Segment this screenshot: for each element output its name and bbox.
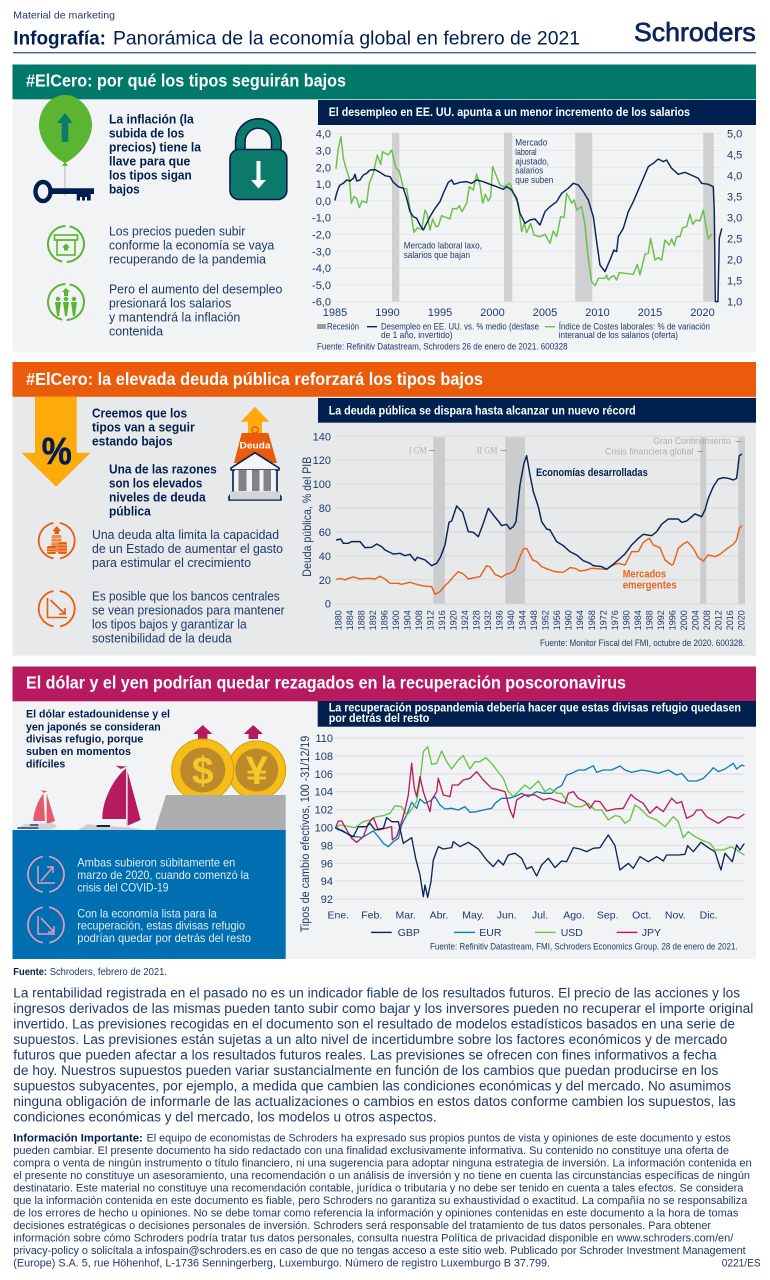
axis labels: y: 110 xyxy=(315,733,333,745)
axis labels: years: 1880 xyxy=(333,610,343,630)
important information: de los errores de hecho u opiniones. No se debe tomar como referencia la información y opiniones contenidas en este documento a la hora de tomas xyxy=(13,1208,739,1220)
label: emerging markets: Mercados xyxy=(623,569,666,581)
axis labels: right: 3,0 xyxy=(727,213,742,225)
axis labels: y: 98 xyxy=(321,840,333,852)
annotation: tight labour market: salarios xyxy=(515,166,544,177)
axis labels: left: 1,0 xyxy=(316,179,331,191)
text: unemployment presses wages: y mantendrá la inflación xyxy=(109,310,240,324)
axis labels: years: 1956 xyxy=(552,610,562,630)
text: inflation key: La inflación (la xyxy=(109,112,195,126)
text: rates stay low: tipos van a seguir xyxy=(92,420,195,434)
axis labels: months: May. xyxy=(462,909,484,921)
axis labels: years: 1960 xyxy=(564,610,574,630)
axis labels: years: 1912 xyxy=(426,610,436,630)
axis labels: years: 1996 xyxy=(667,610,677,630)
axis labels: months: Ene. xyxy=(327,909,349,921)
text: inflation key: bajos xyxy=(109,182,140,196)
axis labels: years: 2005 xyxy=(533,307,557,319)
event labels xyxy=(409,436,742,457)
text: inflation key: subida de los xyxy=(109,126,184,140)
text: safe-haven currencies: divisas refugio, porque xyxy=(26,734,143,746)
line: developed economies xyxy=(337,454,742,569)
text: high debt limits spending: para estimular el crecimiento xyxy=(92,556,251,570)
label: emerging markets xyxy=(623,569,677,591)
axis labels: left: 3,0 xyxy=(316,146,331,158)
axis labels: y: 108 xyxy=(315,751,333,763)
axis labels: years: 1924 xyxy=(460,610,470,630)
heading: section 3: El dólar y el yen podrían quedar rezagados en la recuperación poscoronavirus xyxy=(26,672,626,692)
disclaimer paragraph: de hoy. Nuestros supuestos pueden variar sustancialmente en función de los cambios que puedan producirse en los xyxy=(13,1063,719,1078)
axis labels: years: 1896 xyxy=(379,610,389,630)
line: JPY xyxy=(336,763,744,842)
disclaimer paragraph: ingresos derivados de las mismas pueden tanto subir como bajar y los inversores pueden no recuperar el importe original xyxy=(13,1001,753,1016)
axis labels: months: Dic. xyxy=(700,909,718,921)
line chart: effective exchange rates xyxy=(315,733,744,921)
text: unemployment presses wages xyxy=(109,282,282,338)
panel: blue sea text box xyxy=(12,830,286,959)
text: lag behind: Con la economía lista para la xyxy=(77,906,217,920)
axis labels: y xyxy=(315,733,333,906)
line: GBP xyxy=(336,818,744,897)
text: high debt: Una de las razones xyxy=(109,462,217,476)
axis labels: y: 104 xyxy=(315,787,333,799)
axis labels: months: Jul. xyxy=(532,909,548,921)
annotation: tight labour market: Mercado xyxy=(515,138,547,149)
legend: chart 1: Desempleo en EE. UU. vs. % medio (desfase xyxy=(381,321,539,332)
axis labels: months: Jun. xyxy=(497,909,517,921)
panel: section 2, public debt xyxy=(12,362,756,656)
axis labels: y: 20 xyxy=(319,575,331,587)
legend: currencies xyxy=(371,927,661,939)
axis labels: y: 40 xyxy=(319,551,331,563)
text: rates stay low: Creemos que los xyxy=(92,406,187,420)
chart title: US unemployment: El desempleo en EE. UU. apunta a un menor incremento de los salarios xyxy=(329,107,690,119)
chart title: currencies: por detrás del resto xyxy=(329,713,429,725)
label: emerging markets: emergentes xyxy=(623,579,677,591)
axis labels: years: 1995 xyxy=(428,307,452,319)
source: infographic: Schroders, febrero de 2021. xyxy=(50,967,167,978)
event labels: Gran Confinamiento xyxy=(653,436,731,447)
axis labels: months: Mar. xyxy=(395,909,416,921)
axis labels: y: 100 xyxy=(313,479,331,491)
text: safe-haven currencies: yen japonés se consideran xyxy=(26,721,161,733)
axis labels: right: 2,5 xyxy=(727,234,742,246)
line: EUR xyxy=(336,763,744,847)
text: safe-haven currencies xyxy=(26,709,170,770)
icon: coin stacks xyxy=(36,520,78,562)
legend: currencies: GBP xyxy=(398,927,420,939)
illustration: dollar coin xyxy=(172,725,234,801)
axis labels: y: 0 xyxy=(325,599,331,611)
icon: falling chart xyxy=(25,904,67,946)
important information: El equipo de economistas de Schroders ha expresado sus propios puntos de vista y opiniones de este documento y estos xyxy=(146,1133,731,1145)
axis labels: years: 1884 xyxy=(345,610,355,630)
axis labels: months: Ago. xyxy=(563,909,585,921)
disclaimer paragraph: supuestos subyacentes, por ejemplo, a medida que cambien las condiciones económicas y del mercado. No asumimos xyxy=(13,1079,731,1094)
axis labels: y xyxy=(313,431,331,611)
axis labels: months: Feb. xyxy=(361,909,382,921)
important information: información sobre cómo Schroders podría tratar tus datos personales, consulta nuestra Política de privacidad disponible en www.schroders.com/en/ xyxy=(13,1232,734,1244)
icon: padlock xyxy=(230,124,287,200)
line chart: public debt xyxy=(313,431,746,630)
axis labels: y: 80 xyxy=(319,503,331,515)
important information: destinatario. Este material no constituye una recomendación contable, jurídica o tributaria y no debe ser tenido en cuenta a tales efectos. Se considera xyxy=(13,1183,744,1195)
important information: pueden cambiar. El presente documento ha sido redactado con una finalidad exclusivamente informativa. Su contenido no constituye una oferta de xyxy=(13,1145,729,1157)
axis title: chart 3: Tipos de cambio efectivos, 100 -31/12/19 xyxy=(300,736,312,932)
text: sharp rise: marzo de 2020, cuando comenzó la xyxy=(77,868,249,882)
important information: 0221/ES xyxy=(722,1257,761,1269)
axis labels: y: 96 xyxy=(321,858,333,870)
axis labels: right: 1,5 xyxy=(727,276,742,288)
text: safe-haven currencies: El dólar estadounidense y el xyxy=(26,709,170,721)
legend: chart 1: interanual de los salarios (oferta) xyxy=(559,330,678,341)
text: high debt: son los elevados xyxy=(109,476,202,490)
text: prices may rise xyxy=(109,224,274,266)
axis labels: left xyxy=(312,129,331,309)
line: labour cost index xyxy=(336,137,712,286)
legend: currencies: EUR xyxy=(479,927,502,939)
axis labels: years: 1992 xyxy=(656,610,666,630)
illustration: small boat xyxy=(17,790,57,830)
axis labels: years: 1948 xyxy=(529,610,539,630)
text: inflation key: precios) tiene la xyxy=(109,140,202,154)
label: developed economies: Economías desarrolladas xyxy=(536,467,648,479)
event labels: I GM xyxy=(409,446,427,456)
illustration: large boat xyxy=(67,765,144,837)
icon: rising chart xyxy=(25,853,67,895)
text: rates stay low xyxy=(92,406,195,448)
line: emerging markets xyxy=(337,526,742,594)
axis labels: right: 5,0 xyxy=(727,129,742,141)
heading: section 2 xyxy=(12,362,756,397)
shaded event bands xyxy=(433,437,745,604)
axis labels: years: 2000 xyxy=(480,307,505,319)
disclaimer paragraph: condiciones económicas y del mercado, los modelos u otros aspectos. xyxy=(13,1110,437,1125)
text: high debt xyxy=(109,462,217,518)
important information: Información Importante: xyxy=(13,1133,143,1145)
axis labels: years: 1920 xyxy=(448,610,458,630)
axis labels: left: 2,0 xyxy=(316,162,331,174)
chart title: public debt: La deuda pública se dispara hasta alcanzar un nuevo récord xyxy=(329,405,636,417)
illustration: yen coin xyxy=(228,725,286,799)
text: high debt limits spending xyxy=(92,528,283,570)
text: safe-haven currencies: difíciles xyxy=(26,758,65,770)
axis labels: years: 1928 xyxy=(472,610,482,630)
axis labels: years: 1988 xyxy=(644,610,654,630)
axis labels: left: 4,0 xyxy=(316,129,331,141)
axis labels: years: 2015 xyxy=(638,307,662,319)
important information: privacy-policy o solicítala a infospain@schroders.es en caso de que no tengas acceso a este sitio web. Publicado por Schroder Investment Management xyxy=(13,1245,746,1257)
text: inflation key: los tipos sigan xyxy=(109,168,192,182)
icon: balloon and key xyxy=(36,95,94,201)
text: lag behind xyxy=(77,906,251,945)
recession bands xyxy=(392,133,714,302)
illustration: dollar coin: $ xyxy=(192,750,214,793)
label: marketing material: Material de marketing xyxy=(13,10,115,21)
axis title: chart 2: Deuda pública, % del PIB xyxy=(300,457,314,577)
disclaimer paragraph: ninguna obligación de informarle de las actualizaciones o cambios en estos datos conforme cambien los supuestos, las xyxy=(13,1094,736,1109)
text: prices may rise: conforme la economía se vaya xyxy=(109,238,274,252)
axis labels: months xyxy=(327,909,718,921)
important information xyxy=(13,1133,761,1269)
axis labels: years: 1968 xyxy=(587,610,597,630)
axis labels: years: 1916 xyxy=(437,610,447,630)
line: unemployment xyxy=(335,159,722,302)
axis labels: years xyxy=(323,307,715,319)
annotation: tight labour market: ajustado, xyxy=(515,156,549,167)
axis labels: years: 1976 xyxy=(610,610,620,630)
text: high debt limits spending: Una deuda alta limita la capacidad xyxy=(92,528,279,542)
source: chart 1: Fuente: Refinitiv Datastream, Schroders 26 de enero de 2021. 600328 xyxy=(317,341,568,352)
heading: section 1: #ElCero: por qué los tipos seguirán bajos xyxy=(26,71,346,91)
chart title: public debt xyxy=(318,398,756,423)
axis labels: years: 1936 xyxy=(495,610,505,630)
header xyxy=(13,10,756,53)
disclaimer paragraph: futuros que pueden afectar a los resultados futuros reales. Las previsiones se ofrecen con fines informativos a fecha xyxy=(13,1047,717,1062)
annotation: tight labour market: laboral xyxy=(515,147,537,158)
axis labels: years: 1990 xyxy=(375,307,400,319)
axis labels: years: 2012 xyxy=(714,610,724,630)
panel: section 1, why rates stay low xyxy=(12,64,756,352)
title: Infografía: xyxy=(13,27,106,49)
axis labels: months: Sep. xyxy=(597,909,619,921)
text: rates stay low: estando bajos xyxy=(92,434,173,448)
disclaimer paragraph: La rentabilidad registrada en el pasado no es un indicador fiable de los resultados futuros. El precio de las acciones y los xyxy=(13,985,740,1000)
title: Panorámica de la economía global en febrero de 2021 xyxy=(113,27,580,49)
source: infographic: Fuente: xyxy=(13,967,47,978)
heading: section 1 xyxy=(12,64,756,99)
illustration: grey platform xyxy=(155,795,286,830)
chart title: currencies xyxy=(318,701,756,727)
axis labels: years: 1892 xyxy=(368,610,378,630)
axis labels: left: -5,0 xyxy=(312,280,331,292)
axis labels: years: 2020 xyxy=(736,610,746,630)
axis labels: right: 1,0 xyxy=(727,297,742,309)
annotation: loose labour market: salarios que bajan xyxy=(404,250,470,261)
axis labels: years: 1980 xyxy=(621,610,631,630)
axis labels: y: 102 xyxy=(315,805,333,817)
text: safe-haven currencies: suben en momentos xyxy=(26,746,131,758)
important information: que la información contenida en este documento es fiable, pero Schroders no garantiza su exhaustividad o exactitud. La compañía no se responsabiliza xyxy=(13,1195,748,1207)
icon: people with ring xyxy=(45,281,87,323)
axis labels: years: 1952 xyxy=(541,610,551,630)
text: unemployment presses wages: presionará los salarios xyxy=(109,296,231,310)
text: central banks: sostenibilidad de la deuda xyxy=(92,632,232,646)
legend: currencies: JPY xyxy=(642,927,661,939)
axis labels: years: 1964 xyxy=(575,610,585,630)
axis labels: left: -4,0 xyxy=(312,263,331,275)
axis labels: years: 2000 xyxy=(679,610,689,630)
axis labels: years: 1904 xyxy=(402,610,412,630)
axis labels: years: 2008 xyxy=(702,610,712,630)
axis labels: left: -2,0 xyxy=(312,230,331,242)
axis labels: months: Oct. xyxy=(632,909,651,921)
chart title: currencies: La recuperación pospandemia debería hacer que estas divisas refugio quedasen xyxy=(329,703,741,715)
text: high debt: niveles de deuda xyxy=(109,490,207,504)
important information: el presente no constituye un asesoramiento, una recomendación o un análisis de inversión y no tiene en cuenta las circunstancias específicas de ningún xyxy=(13,1170,750,1182)
text: central banks xyxy=(92,590,285,646)
axis labels: years: 1984 xyxy=(633,610,643,630)
text: central banks: Es posible que los bancos centrales xyxy=(92,590,280,604)
text: sharp rise xyxy=(77,855,249,894)
text: prices may rise: recuperando de la pandemia xyxy=(109,252,266,266)
axis labels: months: Abr. xyxy=(430,909,448,921)
text: lag behind: recuperación, estas divisas refugio xyxy=(77,919,245,933)
axis labels: right: 4,5 xyxy=(727,150,742,162)
axis labels: years: 1985 xyxy=(323,307,347,319)
text: inflation key: llave para que xyxy=(109,154,190,168)
axis labels: right: 2,0 xyxy=(727,255,742,267)
axis labels: y: 94 xyxy=(321,876,333,888)
annotation: loose labour market: Mercado laboral laxo, xyxy=(404,241,482,252)
axis labels: years: 2004 xyxy=(690,610,700,630)
disclaimer paragraph: supuestos. Las previsiones están sujetas a un alto nivel de incertidumbre sobre los factores económicos y de mercado xyxy=(13,1032,727,1047)
icon: box with ring xyxy=(45,223,87,265)
important information: decisiones estratégicas o decisiones personales de inversión. Schroders será responsable del tratamiento de tus datos personales. Para obtener xyxy=(13,1220,711,1232)
axis labels: right xyxy=(727,129,742,309)
annotation: tight labour market: que suben xyxy=(515,175,553,186)
axis labels: right: 3,5 xyxy=(727,192,742,204)
axis labels: years: 1940 xyxy=(506,610,516,630)
axis labels: months: Nov. xyxy=(665,909,686,921)
annotation: loose labour market xyxy=(404,241,482,261)
text: lag behind: podrían quedar por detrás del resto xyxy=(77,931,251,945)
axis labels: years: 2020 xyxy=(690,307,715,319)
event labels: Crisis financiera global xyxy=(605,446,693,457)
text: prices may rise: Los precios pueden subir xyxy=(109,224,245,238)
heading: section 3 xyxy=(12,666,756,701)
text: sharp rise: crisis del COVID-19 xyxy=(77,880,169,894)
axis labels: years: 1888 xyxy=(356,610,366,630)
legend: chart 1: Recesión xyxy=(327,321,359,332)
legend: chart 1: Índice de Costes laborales: % de variación xyxy=(559,321,710,332)
icon: percent down arrow xyxy=(22,397,91,487)
axis labels: left: -1,0 xyxy=(312,213,331,225)
text: high debt: pública xyxy=(109,504,152,518)
axis labels: y: 120 xyxy=(313,455,331,467)
annotation: tight labour market xyxy=(515,138,553,186)
axis labels: y: 92 xyxy=(321,894,333,906)
text: unemployment presses wages: Pero el aumento del desempleo xyxy=(109,282,282,296)
illustration: yen coin: ¥ xyxy=(246,749,269,793)
chart title: US unemployment xyxy=(318,100,756,125)
axis labels: years: 1932 xyxy=(483,610,493,630)
icon: percent down arrow: % xyxy=(42,431,72,473)
axis labels: years: 1908 xyxy=(414,610,424,630)
axis labels: years: 1900 xyxy=(391,610,401,630)
axis labels: years: 2016 xyxy=(725,610,735,630)
important information: (Europe) S.A. 5, rue Höhenhof, L-1736 Senningerberg, Luxemburgo. Número de registro Luxemburgo B 37.799. xyxy=(13,1257,550,1269)
axis labels: years xyxy=(333,610,746,630)
heading: section 2: #ElCero: la elevada deuda pública reforzará los tipos bajos xyxy=(26,369,483,389)
icon: bank with debt weight xyxy=(229,407,281,500)
icon: bank with debt weight: Deuda xyxy=(240,440,271,450)
legend: chart 1 xyxy=(317,321,710,341)
axis labels: years: 2010 xyxy=(585,307,610,319)
icon: falling chart xyxy=(36,588,78,630)
important information: compra o venta de ningún instrumento o título financiero, ni una sugerencia para adoptar ninguna estrategia de inversión. La información contenida en xyxy=(13,1158,752,1170)
legend: currencies: USD xyxy=(561,927,583,939)
text: sharp rise: Ambas subieron súbitamente en xyxy=(77,855,235,869)
axis labels: y: 100 xyxy=(315,823,333,835)
axis labels: right: 4,0 xyxy=(727,171,742,183)
axis labels: left: -3,0 xyxy=(312,246,331,258)
line chart: unemployment vs wages xyxy=(312,129,742,319)
event labels: II GM xyxy=(477,446,498,456)
legend: chart 1: de 1 año, invertido) xyxy=(381,330,453,341)
logo: Schroders: Schroders xyxy=(634,17,756,47)
line: USD xyxy=(336,747,744,855)
panel: section 3, dollar and yen xyxy=(12,666,756,959)
axis labels: years: 1944 xyxy=(518,610,528,630)
disclaimer paragraph: invertido. Las previsiones recogidas en el documento son el resultado de modelos estadísticos basados en una serie de xyxy=(13,1016,735,1031)
text: central banks: los tipos bajos y garantizar la xyxy=(92,618,247,632)
axis labels: y: 140 xyxy=(313,431,331,443)
axis labels: years: 1972 xyxy=(598,610,608,630)
axis labels: y: 106 xyxy=(315,769,333,781)
axis labels: y: 60 xyxy=(319,527,331,539)
text: inflation key xyxy=(109,112,202,196)
disclaimer paragraph xyxy=(13,985,753,1125)
text: central banks: se vean presionados para mantener xyxy=(92,604,285,618)
axis labels: left: -6,0 xyxy=(312,297,331,309)
axis labels: left: 0,0 xyxy=(316,196,331,208)
text: high debt limits spending: de un Estado de aumentar el gasto xyxy=(92,542,283,556)
text: unemployment presses wages: contenida xyxy=(109,324,163,338)
